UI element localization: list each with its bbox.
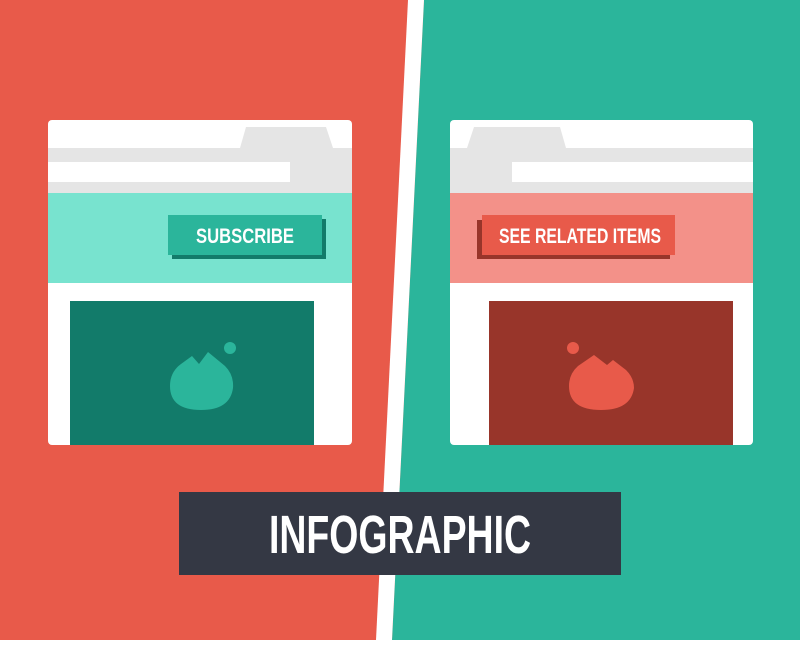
panel: right browser xyxy=(450,120,753,445)
background: teal right xyxy=(392,0,800,640)
divider stripe xyxy=(376,0,424,640)
image placeholder xyxy=(70,301,314,445)
image placeholder xyxy=(489,301,733,445)
panel: left browser xyxy=(48,120,352,445)
button: see related items: SEE RELATED ITEMS xyxy=(499,225,661,248)
button: subscribe: SUBSCRIBE xyxy=(196,225,294,248)
button: subscribe xyxy=(168,215,326,259)
title xyxy=(179,492,621,575)
button: see related items xyxy=(477,215,675,259)
title: INFOGRAPHIC xyxy=(269,505,531,565)
